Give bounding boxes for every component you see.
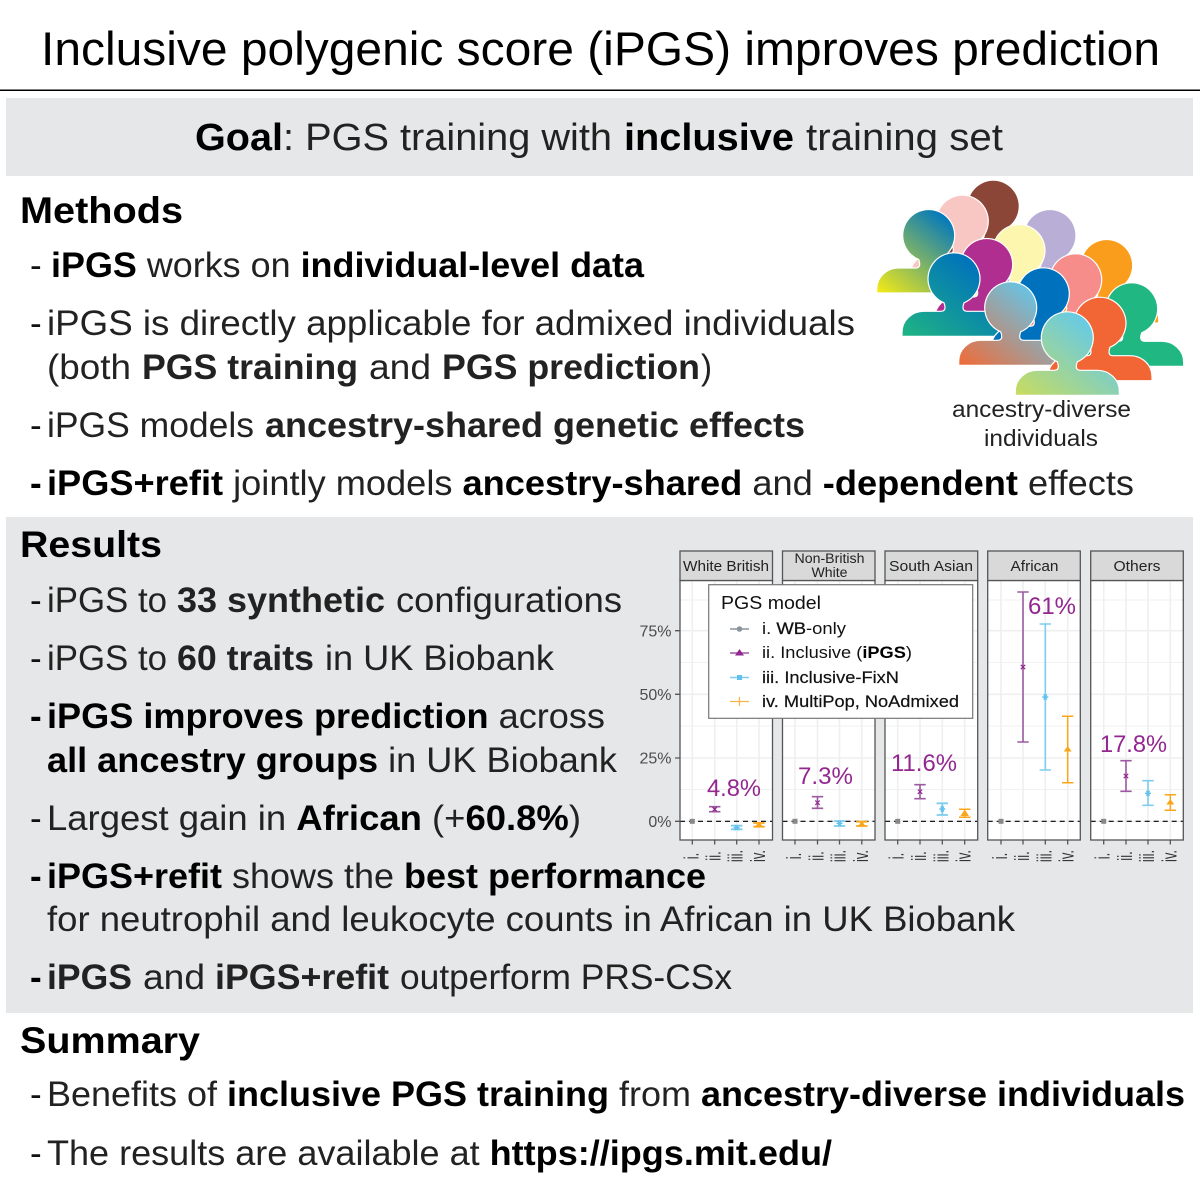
methods item 2 (30, 304, 855, 387)
facet: White British: White British (683, 558, 769, 575)
goal text: training set (806, 117, 1003, 159)
methods item 1: - (30, 246, 42, 285)
summary item 2: - (30, 1134, 42, 1173)
goal text (195, 117, 1003, 159)
heading: methods: Methods (20, 190, 183, 231)
methods item 2: iPGS is directly applicable for admixed individuals (47, 304, 855, 343)
methods item 2: PGS prediction (442, 348, 700, 387)
facet: African: African (1010, 558, 1058, 575)
results item 1: - (30, 581, 42, 620)
y axis labels: 0% (648, 814, 672, 831)
facet: Non-British White: Non-British (794, 551, 864, 566)
caption: ancestry-diverse individuals: individuals (984, 425, 1098, 451)
facet: Non-British White: White (812, 565, 848, 580)
icon: ancestry-diverse people (877, 180, 1184, 395)
heading: summary: Summary (20, 1020, 200, 1061)
facet: Others: iii. (1136, 850, 1159, 862)
results item 6: - (30, 958, 42, 997)
facet: Non-British White: ii. (806, 851, 828, 861)
facet: Others: iv. (1158, 850, 1181, 862)
results item 2: - (30, 639, 42, 678)
facet: South Asian (885, 551, 978, 862)
results item 3: iPGS improves prediction across (47, 697, 605, 736)
methods item 2: PGS training (142, 348, 358, 387)
y axis labels: 25% (639, 750, 672, 768)
results item 1: iPGS to (47, 581, 167, 620)
results item 6: iPGS (47, 958, 132, 997)
methods item 2: ) (701, 348, 712, 387)
legend item: MultiPop, NoAdmixed: iv. MultiPop, NoAdmixed (762, 692, 959, 711)
facet: African: i. (989, 853, 1012, 859)
caption: ancestry-diverse individuals: ancestry-diverse (952, 396, 1131, 422)
results item 6: outperform PRS-CSx (400, 958, 732, 997)
methods item 3: - (30, 406, 42, 445)
methods item 4: iPGS+refit jointly models ancestry-shared and -dependent effects (47, 464, 1134, 503)
facet: Others: 17.8% (1100, 731, 1167, 758)
summary item 1: - (30, 1075, 42, 1114)
results item 3: - (30, 697, 42, 736)
facet: African (988, 551, 1080, 862)
methods item 2: and (369, 348, 431, 387)
facet: South Asian: iv. (953, 850, 975, 862)
panel: goal (6, 98, 1193, 176)
caption: ancestry-diverse individuals (952, 396, 1131, 451)
methods item 2: - (30, 304, 42, 343)
goal text: inclusive (624, 117, 794, 159)
results item 5: iPGS+refit shows the best performance (47, 857, 706, 896)
methods item 4: - (30, 464, 42, 503)
results item 4: Largest gain in African (+60.8%) (47, 799, 581, 838)
methods item 3 (30, 406, 805, 445)
facet: White British (680, 551, 772, 862)
results item 3 (30, 697, 618, 780)
y axis labels (639, 624, 680, 831)
facet: Non-British White: i. (783, 853, 806, 859)
facet: Others: i. (1092, 853, 1114, 859)
results item 6: and (143, 958, 205, 997)
goal text: Goal (195, 117, 283, 159)
results item 2 (30, 639, 555, 678)
results item 4: - (30, 799, 42, 838)
summary item 1: Benefits of inclusive PGS training from ancestry-diverse individuals (47, 1075, 1185, 1114)
facet: White British: iii. (725, 850, 747, 862)
methods item 3: ancestry-shared genetic effects (265, 406, 805, 445)
facet: South Asian: ii. (908, 851, 931, 861)
facet: Others: Others (1114, 558, 1160, 575)
facet: South Asian: South Asian (889, 558, 973, 575)
facet: South Asian: 11.6% (891, 750, 957, 777)
facet: White British: iv. (747, 850, 770, 862)
facet: African: 61% (1028, 593, 1076, 620)
y axis labels: 50% (639, 687, 672, 704)
facet: African: ii. (1011, 851, 1034, 861)
results item 2: 60 traits (177, 639, 314, 678)
panel: results (6, 517, 1193, 1013)
results item 1 (30, 581, 622, 620)
facet: Non-British White: 7.3% (798, 763, 853, 790)
goal text: : PGS training with (283, 117, 612, 159)
results item 6: iPGS+refit (215, 958, 389, 997)
facet: Non-British White: iv. (850, 850, 873, 862)
title: Inclusive polygenic score (iPGS) improves prediction (41, 22, 1160, 75)
methods item 2: (both (47, 348, 131, 387)
facet: Others (1091, 551, 1183, 862)
results item 5: for neutrophil and leukocyte counts in African in UK Biobank (47, 900, 1016, 939)
legend: PGS model (709, 585, 973, 718)
summary item 2: The results are available at https://ipgs.mit.edu/ (47, 1134, 832, 1173)
methods item 3: iPGS models (47, 406, 254, 445)
facet: South Asian: iii. (930, 850, 953, 862)
results item 5: - (30, 857, 42, 896)
facet: African: iv. (1056, 850, 1078, 862)
legend item: WB-only: i. WB-only (762, 619, 847, 638)
panel: summary (20, 1020, 1185, 1173)
results item 2: in UK Biobank (325, 639, 555, 678)
y axis labels: 75% (639, 624, 672, 640)
results item 1: configurations (396, 581, 622, 620)
facet: White British: i. (680, 853, 703, 859)
methods item 1: iPGS works on individual-level data (51, 246, 645, 285)
facet: Non-British White: iii. (828, 850, 850, 862)
legend item: Inclusive-FixN: iii. Inclusive-FixN (762, 668, 899, 687)
heading: results: Results (20, 524, 162, 565)
results item 3: all ancestry groups in UK Biobank (47, 741, 618, 780)
facet: White British: 4.8% (707, 775, 761, 802)
facet: Others: ii. (1114, 851, 1137, 861)
panel: methods (20, 190, 1134, 503)
facet: South Asian: i. (886, 853, 908, 859)
results item 5 (30, 857, 1016, 939)
chart: PGS model comparison (639, 551, 1183, 862)
facet: African: iii. (1033, 850, 1056, 862)
results item 6 (30, 958, 732, 997)
legend item: Inclusive iPGS: ii. Inclusive ( iPGS) (762, 643, 912, 662)
results item 2: iPGS to (47, 639, 167, 678)
facet: White British: ii. (703, 851, 725, 861)
legend: PGS model: PGS model (721, 593, 821, 613)
results item 1: 33 synthetic (177, 581, 385, 620)
legend item: WB-only (730, 619, 847, 638)
facet: Non-British White (782, 551, 875, 862)
